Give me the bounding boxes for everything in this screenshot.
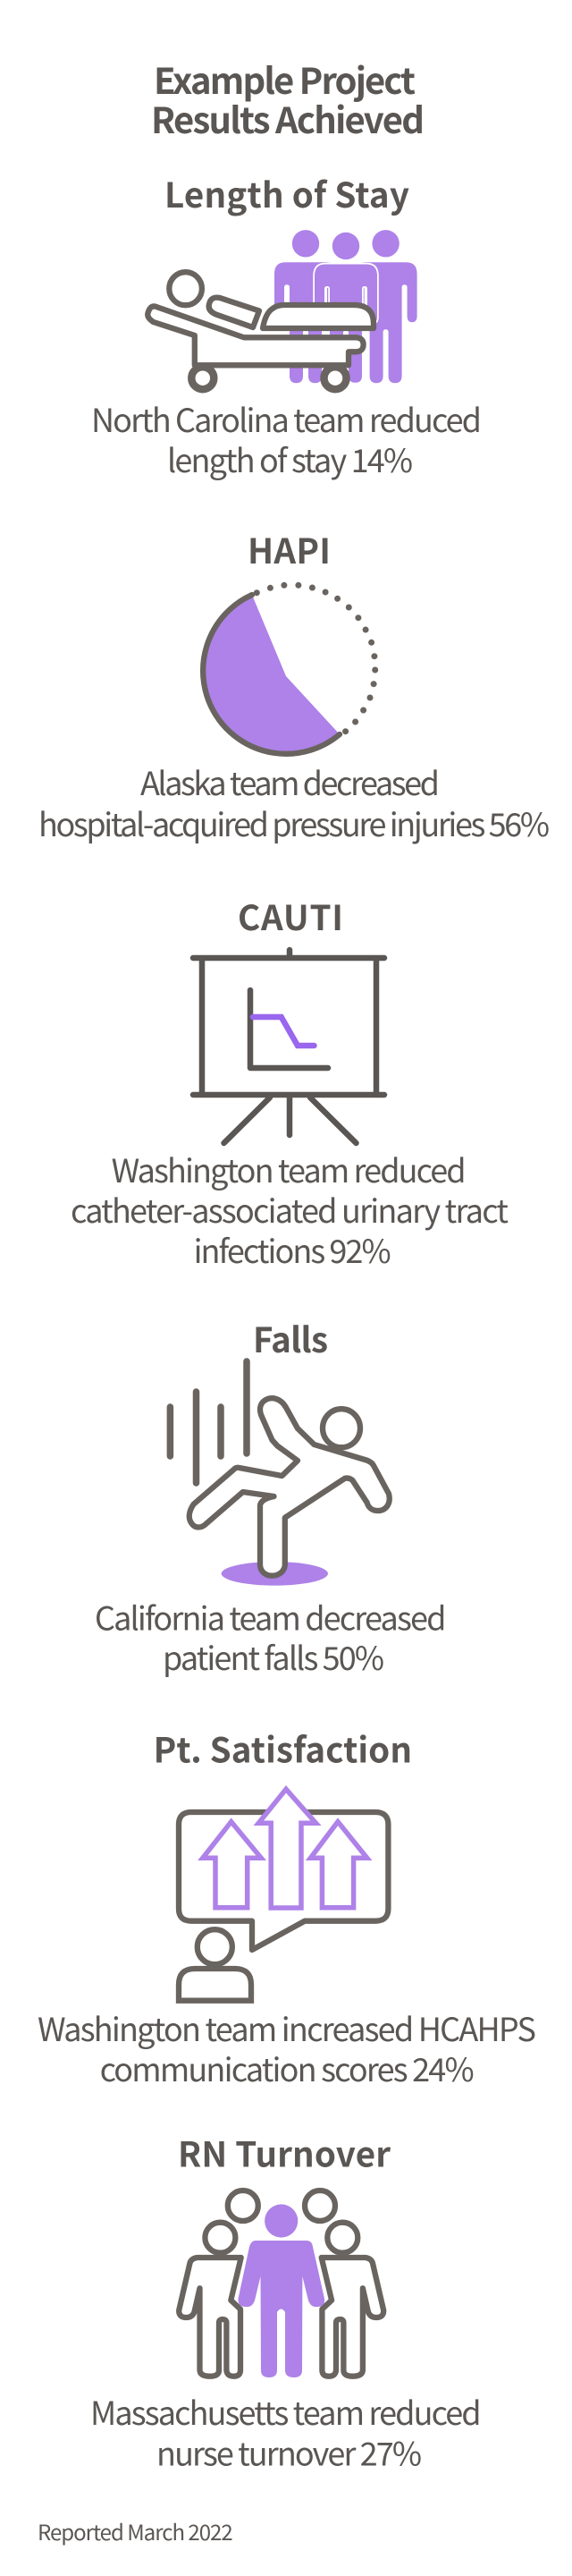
heading: CAUTI: CAUTI: [238, 891, 343, 941]
heading: Pt. Satisfaction: Pt. Satisfaction: [154, 1724, 412, 1774]
text: falls result: [95, 1594, 446, 1680]
text: falls result: California team decreased: [95, 1594, 446, 1640]
text: length of stay result: length of stay 14%: [167, 436, 413, 482]
footnote: Reported March 2022: [38, 2515, 233, 2546]
text: length of stay result: North Carolina team reduced: [91, 395, 482, 442]
text: satisfaction result: [38, 2004, 536, 2091]
text: satisfaction result: Washington team increased HCAHPS: [38, 2004, 536, 2051]
icon: presentation easel with declining chart: [193, 950, 384, 1143]
panel: Length of Stay: [91, 168, 482, 482]
text: CAUTI result: [71, 1146, 509, 1273]
heading: Length of Stay: Length of Stay: [164, 168, 409, 218]
text: CAUTI result: catheter-associated urinary tract: [71, 1186, 509, 1233]
text: falls result: patient falls 50%: [163, 1633, 384, 1680]
text: turnover result: [90, 2388, 482, 2476]
heading: Falls: Falls: [253, 1313, 328, 1363]
icon: speech bubble with rising arrows and person: [179, 1789, 388, 2001]
text: HAPI result: hospital-acquired pressure injuries 56%: [38, 800, 550, 846]
icon: person falling: [170, 1361, 390, 1586]
panel: Falls: [95, 1313, 446, 1680]
icon: purple nurse among colleagues: [179, 2190, 383, 2377]
icon: pie chart 56 percent: [203, 582, 378, 754]
text: length of stay result: [91, 395, 482, 482]
title: Example Project: [154, 53, 416, 105]
panel: HAPI: [38, 524, 550, 846]
panel: Patient Satisfaction: [38, 1724, 536, 2091]
title: Results Achieved: [151, 92, 425, 144]
icon: patient on bed with three staff: [147, 230, 417, 389]
panel: RN Turnover: [90, 2128, 482, 2476]
heading: RN Turnover: RN Turnover: [178, 2128, 391, 2178]
panel: CAUTI: [71, 891, 509, 1273]
text: CAUTI result: Washington team reduced: [112, 1146, 467, 1192]
text: turnover result: nurse turnover 27%: [156, 2429, 422, 2476]
heading: HAPI: HAPI: [248, 524, 331, 574]
text: HAPI result: Alaska team decreased: [140, 758, 440, 805]
text: CAUTI result: infections 92%: [194, 1226, 391, 1273]
text: HAPI result: [38, 758, 550, 846]
title: [151, 53, 425, 144]
text: satisfaction result: communication scores 24%: [100, 2045, 475, 2091]
text: turnover result: Massachusetts team reduced: [90, 2388, 482, 2435]
